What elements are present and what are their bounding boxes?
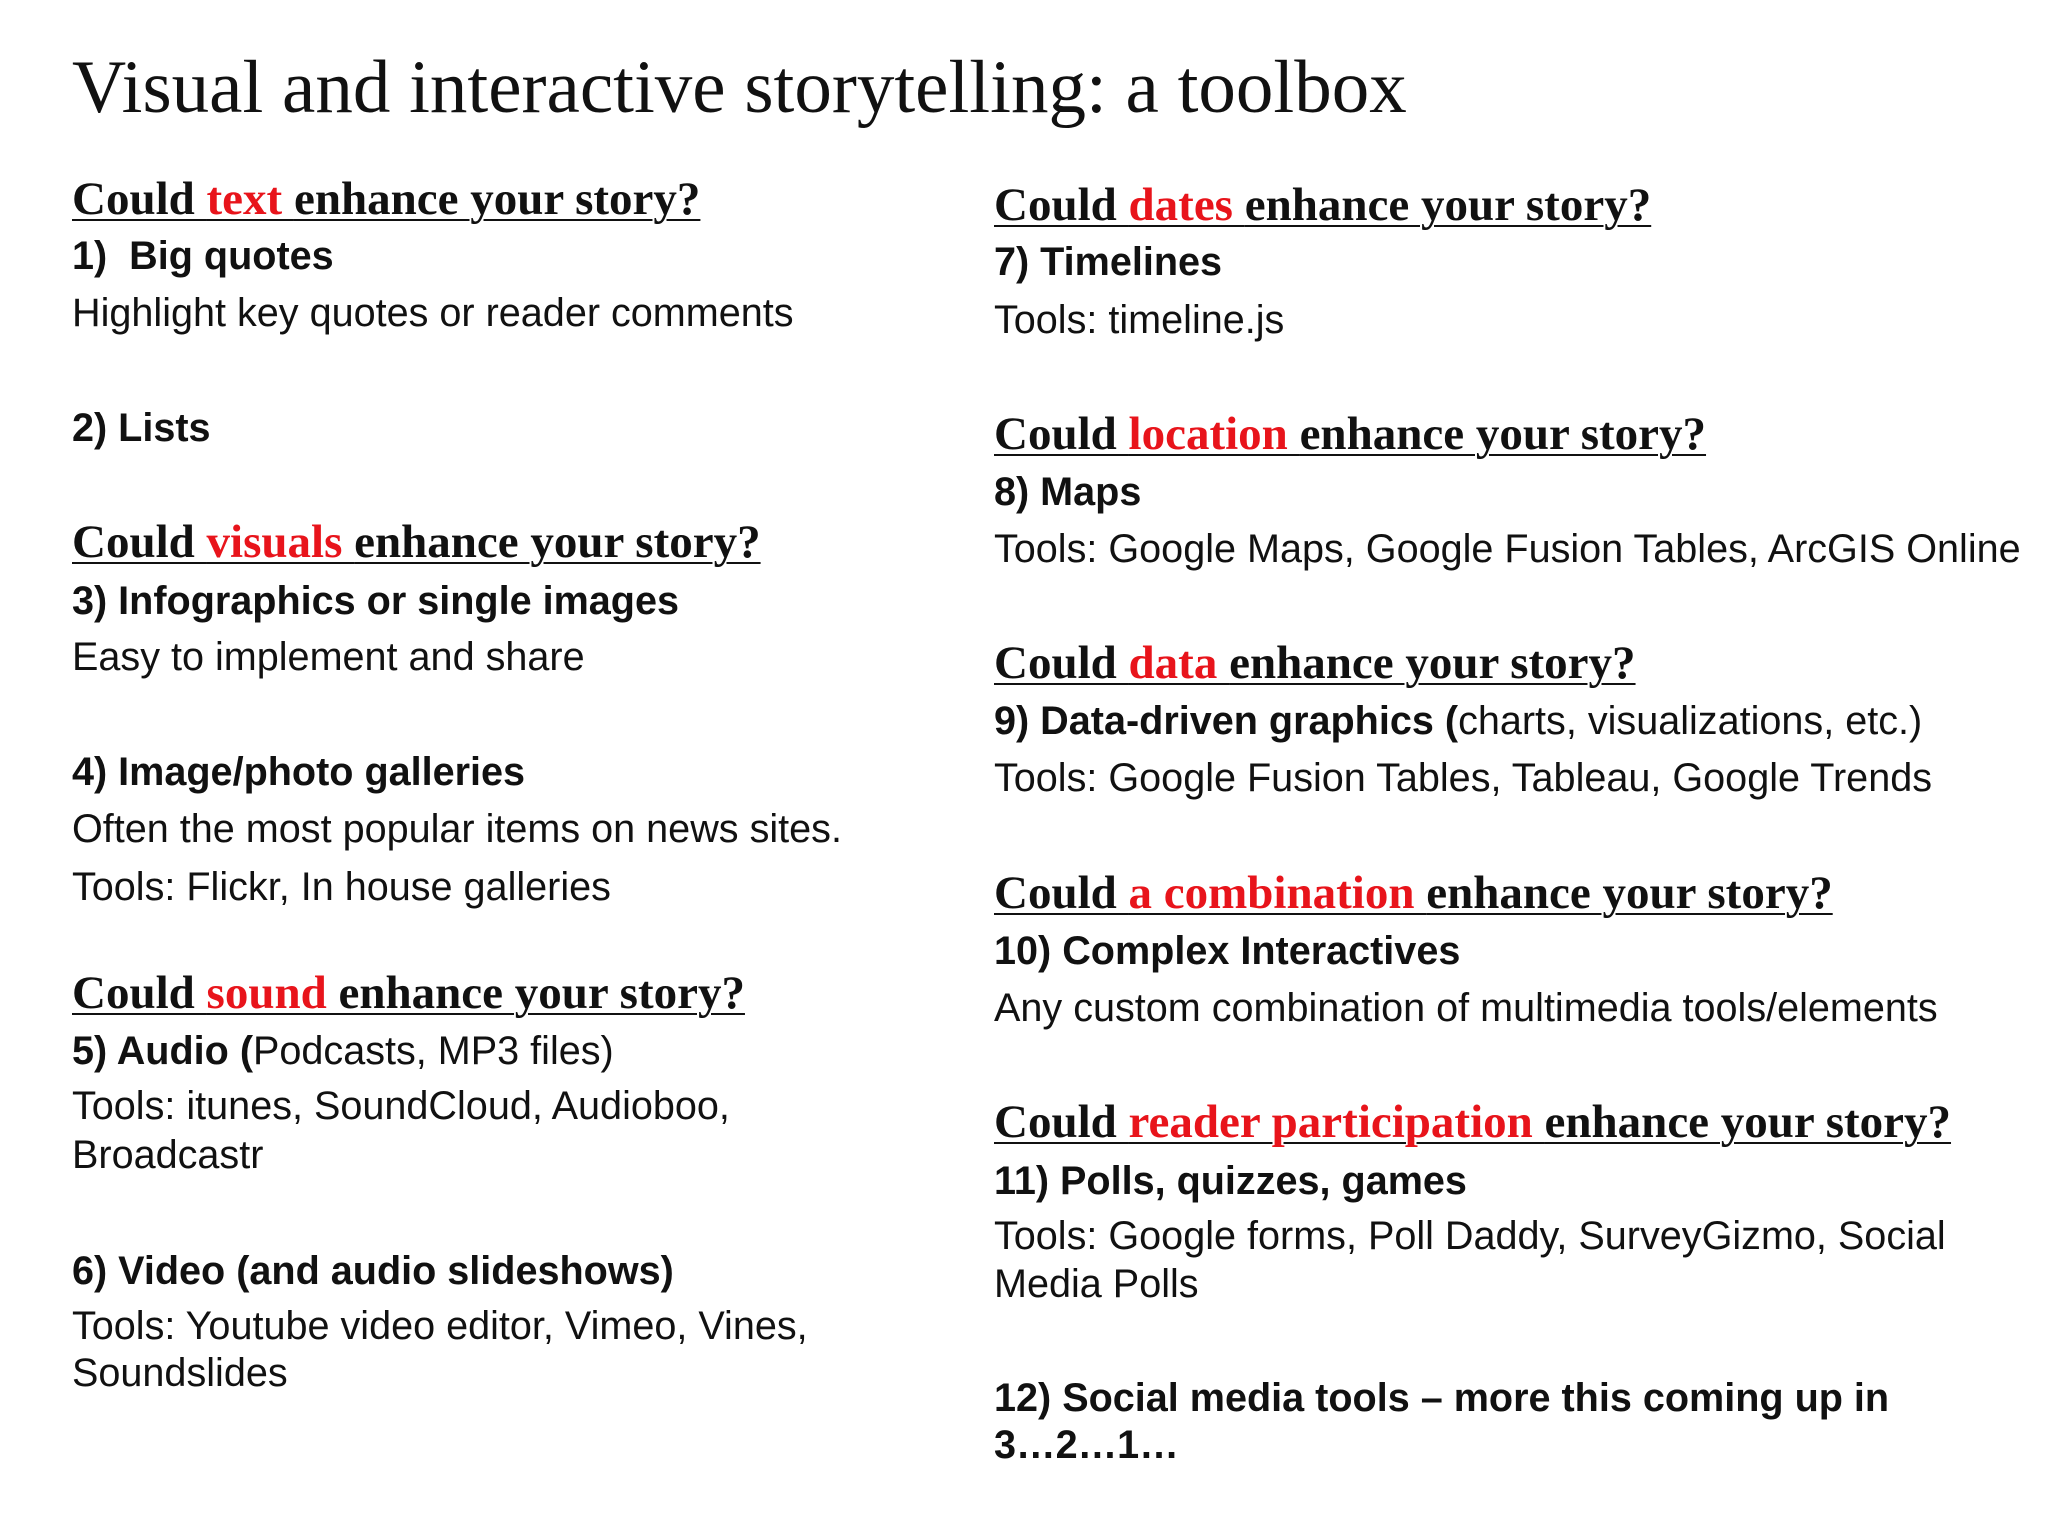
item 4: 4) Image/photo galleries xyxy=(72,750,525,794)
heading: visuals: Could visuals enhance your story? xyxy=(72,516,761,568)
item 6 tools xyxy=(72,1304,808,1395)
item 3: 3) Infographics or single images xyxy=(72,579,679,623)
item 7 tools: Tools: timeline.js xyxy=(994,298,1284,342)
item 12 xyxy=(994,1376,1889,1467)
item 10 description: Any custom combination of multimedia tools/elements xyxy=(994,986,1938,1030)
item 12: 3…2…1… xyxy=(994,1423,1179,1467)
item 1: 1) Big quotes xyxy=(72,234,334,278)
left column xyxy=(72,173,842,1395)
item 7: 7) Timelines xyxy=(994,240,1222,284)
item 12: 12) Social media tools – more this coming up in xyxy=(994,1376,1889,1420)
heading: data: Could data enhance your story? xyxy=(994,637,1636,689)
item 2: 2) Lists xyxy=(72,406,211,450)
right column xyxy=(994,179,2021,1467)
title: Visual and interactive storytelling: a toolbox xyxy=(72,46,1407,129)
heading: location: Could location enhance your story? xyxy=(994,408,1706,460)
item 8 tools: Tools: Google Maps, Google Fusion Tables, ArcGIS Online xyxy=(994,527,2021,571)
item 1 description: Highlight key quotes or reader comments xyxy=(72,291,794,335)
heading: reader participation: Could reader participation enhance your story? xyxy=(994,1096,1951,1148)
item 5 tools: Tools: itunes, SoundCloud, Audioboo, xyxy=(72,1084,730,1128)
item 5 tools xyxy=(72,1084,730,1177)
heading: dates: Could dates enhance your story? xyxy=(994,179,1651,231)
item 10: 10) Complex Interactives xyxy=(994,929,1460,973)
item 11 tools xyxy=(994,1214,1946,1306)
heading: text: Could text enhance your story? xyxy=(72,173,700,225)
item 11 tools: Tools: Google forms, Poll Daddy, SurveyGizmo, Social xyxy=(994,1214,1946,1258)
item 6 tools: Tools: Youtube video editor, Vimeo, Vines, xyxy=(72,1304,808,1348)
item 9: 9) Data-driven graphics (charts, visualizations, etc.) xyxy=(994,699,1922,743)
item 8: 8) Maps xyxy=(994,470,1141,514)
item 5: 5) Audio (Podcasts, MP3 files) xyxy=(72,1029,614,1073)
item 5 tools: Broadcastr xyxy=(72,1133,263,1177)
item 6 tools: Soundslides xyxy=(72,1351,288,1395)
item 4 tools: Tools: Flickr, In house galleries xyxy=(72,865,611,909)
item 9 tools: Tools: Google Fusion Tables, Tableau, Google Trends xyxy=(994,756,1932,800)
item 11: 11) Polls, quizzes, games xyxy=(994,1159,1467,1203)
heading: sound: Could sound enhance your story? xyxy=(72,967,745,1019)
item 11 tools: Media Polls xyxy=(994,1262,1199,1306)
item 4 description: Often the most popular items on news sites. xyxy=(72,807,842,851)
item 3 description: Easy to implement and share xyxy=(72,635,585,679)
item 6: 6) Video (and audio slideshows) xyxy=(72,1249,674,1293)
heading: combination: Could a combination enhance your story? xyxy=(994,867,1833,919)
